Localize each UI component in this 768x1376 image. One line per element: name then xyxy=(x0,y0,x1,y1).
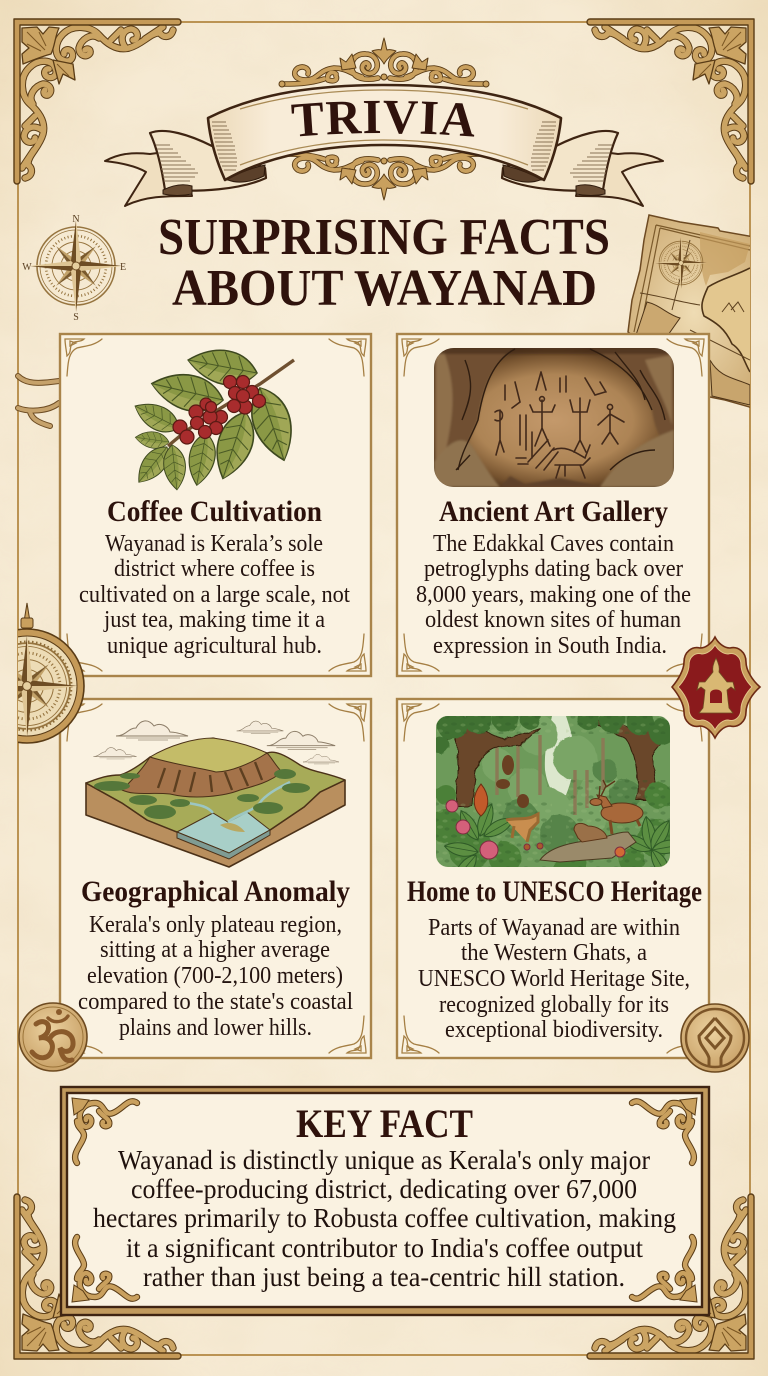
panel: key fact xyxy=(61,1087,709,1315)
treasure map decoration xyxy=(628,215,760,410)
text block: The Edakkal Caves contain xyxy=(433,531,674,557)
heading: Home to UNESCO Heritage xyxy=(407,875,702,908)
text block: the Western Ghats, a xyxy=(461,940,647,966)
text block: petroglyphs dating back over xyxy=(424,556,683,582)
text block: just tea, making time it a xyxy=(103,607,325,633)
text block: Wayanad is Kerala’s sole xyxy=(105,531,323,557)
heading: Ancient Art Gallery xyxy=(439,495,668,528)
text block xyxy=(416,531,691,659)
icon: coffee branch xyxy=(130,344,302,491)
text block: it a significant contributor to India's coffee output xyxy=(126,1233,643,1263)
panel: UNESCO heritage xyxy=(397,699,709,1058)
text block xyxy=(418,915,690,1043)
text block: recognized globally for its xyxy=(439,992,669,1018)
heading: Coffee Cultivation xyxy=(107,495,322,528)
text block: district where coffee is xyxy=(114,556,315,582)
text block: sitting at a higher average xyxy=(100,937,330,963)
illustration: cave petroglyphs xyxy=(434,348,674,487)
panel: coffee cultivation xyxy=(60,334,371,676)
text block xyxy=(78,912,353,1041)
text block: elevation (700-2,100 meters) xyxy=(87,963,343,989)
text block: oldest known sites of human xyxy=(425,607,681,633)
text block: Wayanad is distinctly unique as Kerala's only major xyxy=(118,1145,650,1175)
deer xyxy=(590,780,643,834)
compass rose decoration xyxy=(22,214,126,323)
illustration: plateau landscape xyxy=(86,721,345,867)
panel: geographical anomaly xyxy=(60,699,371,1058)
icon: red temple lantern badge xyxy=(672,637,760,738)
icon: brass compass xyxy=(18,602,85,744)
text block: Kerala's only plateau region, xyxy=(89,912,342,938)
banner ornament: bottom xyxy=(279,151,489,200)
text block: hectares primarily to Robusta coffee cultivation, making xyxy=(93,1203,676,1233)
text block xyxy=(93,1145,676,1292)
text block: cultivated on a large scale, not xyxy=(79,582,350,608)
ornate corner: bottom right xyxy=(587,1194,754,1359)
compass rose decoration: N xyxy=(72,214,80,225)
icon: om medallion xyxy=(19,1003,87,1071)
main title xyxy=(158,209,610,317)
main title: ABOUT WAYANAD xyxy=(172,260,597,317)
ribbon banner xyxy=(104,84,664,207)
branch decoration xyxy=(18,376,59,426)
text block: UNESCO World Heritage Site, xyxy=(418,966,690,992)
heading: Geographical Anomaly xyxy=(81,875,350,908)
ornate corner: bottom left xyxy=(14,1194,181,1359)
main title: SURPRISING FACTS xyxy=(158,209,610,266)
text block: expression in South India. xyxy=(433,633,667,659)
banner ornament: top xyxy=(279,38,489,87)
text block: unique agricultural hub. xyxy=(107,633,322,659)
text block: plains and lower hills. xyxy=(119,1015,312,1041)
illustration: rainforest with wildlife xyxy=(436,716,670,867)
panel: ancient art gallery xyxy=(397,334,709,676)
compass rose decoration: W xyxy=(22,262,32,273)
icon: world heritage medallion xyxy=(681,1004,749,1072)
text block: compared to the state's coastal xyxy=(78,989,353,1015)
text block: exceptional biodiversity. xyxy=(445,1017,663,1043)
text block: 8,000 years, making one of the xyxy=(416,582,691,608)
compass rose decoration: S xyxy=(73,312,79,323)
text block: rather than just being a tea-centric hill station. xyxy=(143,1262,625,1292)
banner title: TRIVIA xyxy=(291,100,474,137)
ornate corner: top right xyxy=(587,19,754,184)
text block: Parts of Wayanad are within xyxy=(428,915,680,941)
compass rose decoration: E xyxy=(120,262,126,273)
heading: KEY FACT xyxy=(296,1101,473,1146)
ornate corner: top left xyxy=(14,19,181,184)
text block: coffee-producing district, dedicating over 67,000 xyxy=(131,1174,637,1204)
text block xyxy=(79,531,350,659)
